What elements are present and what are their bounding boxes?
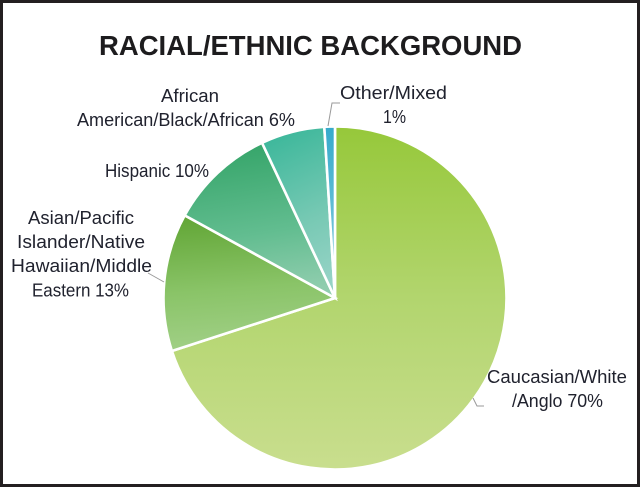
label: Other/Mixed 1%: 1% (383, 107, 406, 127)
slice: Asian/Pacific Islander 13% (164, 215, 335, 351)
label: African American/Black/African 6% (77, 86, 295, 130)
slice: Caucasian/White/Anglo 70% (172, 126, 507, 470)
label: Other/Mixed 1% (340, 83, 447, 127)
leader line: Caucasian (473, 398, 484, 406)
label: Caucasian/White/Anglo 70% (487, 367, 627, 411)
label: Other/Mixed 1%: Other/Mixed (340, 83, 447, 103)
slice: African American/Black/African 6% (262, 127, 335, 298)
label: Asian/Pacific Islander/Native Hawaiian/Middle Eastern 13%: Asian/Pacific (28, 208, 134, 228)
label: African American/Black/African 6%: African (161, 86, 219, 106)
slice: Hispanic 10% (185, 143, 335, 298)
title: RACIAL/ETHNIC BACKGROUND (99, 30, 522, 61)
slice: Other/Mixed 1% (324, 126, 335, 298)
leader line: Other/Mixed (328, 103, 340, 126)
label: Asian/Pacific Islander/Native Hawaiian/Middle Eastern 13% (11, 208, 152, 300)
label: Asian/Pacific Islander/Native Hawaiian/Middle Eastern 13%: Hawaiian/Middle (11, 256, 152, 276)
leader line: Asian/Pacific (148, 273, 164, 282)
label: African American/Black/African 6%: American/Black/African 6% (77, 110, 295, 130)
label: Hispanic 10%: Hispanic 10% (105, 161, 209, 181)
label: Asian/Pacific Islander/Native Hawaiian/Middle Eastern 13%: Eastern 13% (32, 280, 129, 300)
label: Asian/Pacific Islander/Native Hawaiian/Middle Eastern 13%: Islander/Native (17, 232, 145, 252)
pie chart (164, 126, 507, 469)
label: Caucasian/White/Anglo 70%: Caucasian/White (487, 367, 627, 387)
label: Caucasian/White/Anglo 70%: /Anglo 70% (512, 391, 603, 411)
